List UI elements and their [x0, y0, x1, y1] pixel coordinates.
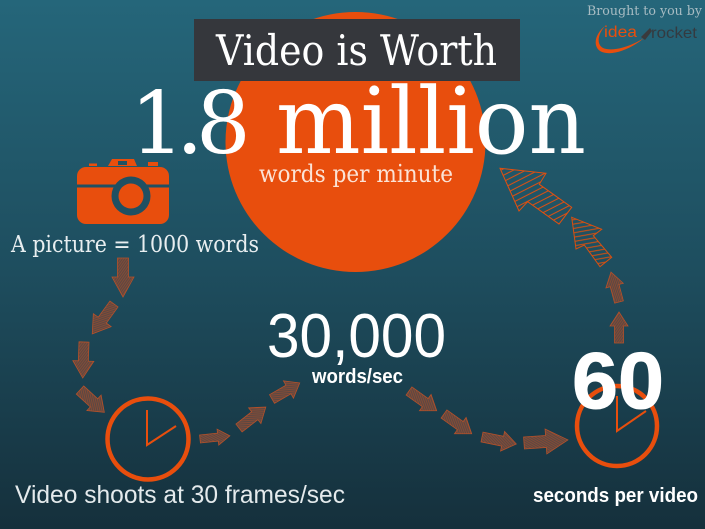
headline number: 8	[196, 74, 251, 174]
arrow	[199, 428, 231, 447]
headline number: .	[176, 74, 203, 174]
attribution: Brought to you by	[587, 4, 703, 19]
arrow	[73, 382, 111, 420]
hatched arrow	[572, 217, 612, 267]
headline number: 1	[130, 74, 185, 174]
logo: idea rocket: rocket	[651, 25, 698, 42]
arrow	[83, 298, 123, 340]
arrow	[403, 383, 442, 419]
headline number: million	[276, 68, 586, 175]
arrow	[602, 270, 628, 304]
label: words/sec: words/sec	[311, 366, 403, 388]
arrow	[480, 427, 518, 454]
icon: camera	[77, 159, 169, 224]
clock: 60 seconds	[577, 386, 657, 466]
caption: seconds per video: seconds per video	[533, 485, 698, 507]
large hatched arrow	[500, 168, 572, 224]
arrow	[72, 342, 94, 378]
arrow	[112, 258, 134, 297]
clock: 30 frames	[108, 398, 188, 480]
subheading: words per minute: words per minute	[259, 160, 453, 188]
big number: 30,000: 30,000	[267, 302, 446, 371]
caption: a picture: A picture = 1000 words	[10, 232, 259, 258]
orange circle	[226, 12, 486, 272]
arrow	[610, 312, 628, 343]
arrow	[438, 406, 477, 442]
big number: 60: 60	[572, 336, 664, 425]
arrow	[523, 427, 569, 455]
logo: idea rocket: idea	[604, 24, 637, 41]
caption: video shoots: Video shoots at 30 frames/sec	[15, 481, 345, 509]
title: Video is Worth	[215, 26, 497, 75]
logo: idea rocket	[596, 24, 698, 53]
arrow	[233, 399, 272, 436]
arrow	[267, 374, 305, 408]
